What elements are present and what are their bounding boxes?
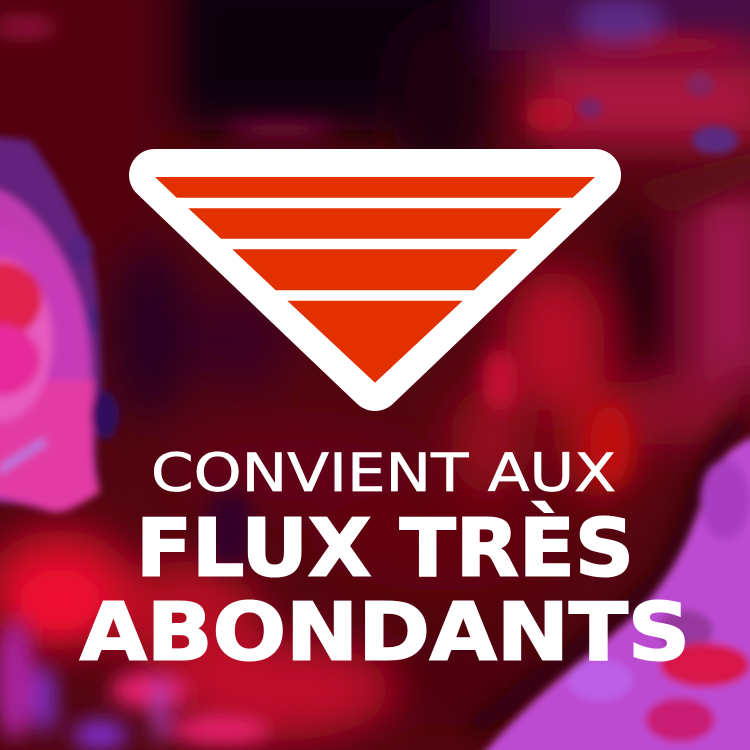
- stripe 4: bottom tip: [287, 301, 463, 383]
- heading line 3: ABONDANTS: [80, 586, 690, 678]
- heading text: [80, 443, 690, 678]
- stripe 1: [155, 177, 595, 198]
- swirl layers: [0, 135, 102, 512]
- lower right violet mass: [470, 432, 750, 750]
- stripe 3: [232, 249, 518, 290]
- heading line 2: FLUX TRÈS: [136, 502, 634, 594]
- heading line 1: CONVIENT AUX: [151, 443, 616, 504]
- icon: flow level triangle: [155, 175, 595, 385]
- stripe 2: [188, 208, 562, 239]
- white rounded triangle badge: [155, 175, 595, 385]
